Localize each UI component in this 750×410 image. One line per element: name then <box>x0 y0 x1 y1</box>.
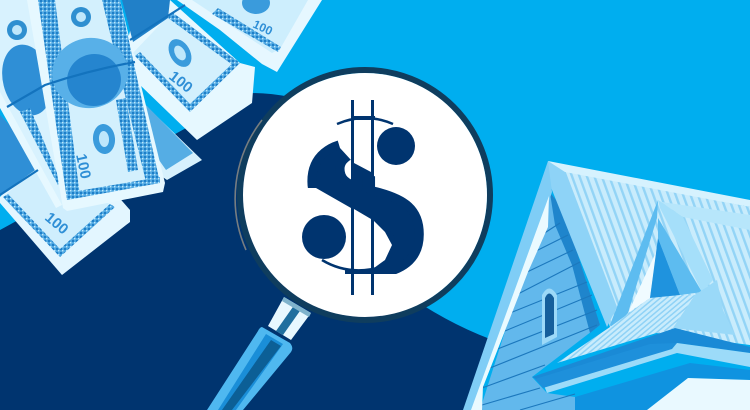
house: dormer ridge <box>658 200 750 230</box>
house: siding wall <box>480 193 600 410</box>
dollar sign: left bar <box>351 100 354 295</box>
illustration: house roof <box>463 161 750 410</box>
magnifier: rim highlight <box>235 120 262 250</box>
money stack: under layer right <box>140 100 202 180</box>
banknote label: 100 <box>166 68 196 97</box>
rubber bands <box>0 5 185 195</box>
dollar sign: character: $ <box>294 80 436 320</box>
house: lower porch roof <box>557 295 695 363</box>
background: navy curved shape <box>0 93 490 410</box>
magnifier: handle <box>207 327 292 410</box>
house: ridge trim <box>548 161 750 207</box>
house: attic vent <box>542 288 557 345</box>
illustration: stacks of money <box>0 0 322 275</box>
money stack: left <box>0 0 66 208</box>
banknote label: 100 <box>251 17 275 38</box>
house: dormer roof <box>683 217 750 345</box>
house: siding lines <box>482 223 597 410</box>
money stack: center right <box>122 0 255 140</box>
dollar sign: lower terminal <box>302 215 346 259</box>
magnifier: lens <box>243 73 487 317</box>
house: siding shade <box>550 193 600 333</box>
banknote label: 100 <box>41 209 72 238</box>
house: cornice <box>532 328 750 393</box>
money stack: bottom left <box>0 130 130 275</box>
dollar sign: white counters <box>296 120 428 280</box>
magnifier: rim <box>240 70 490 320</box>
magnifying glass <box>207 70 490 410</box>
dollar sign <box>302 100 424 295</box>
house: outer gable edge <box>463 161 552 410</box>
dollar sign: upper terminal <box>377 127 415 165</box>
money stack: top right <box>177 0 322 72</box>
house: main roof <box>565 170 750 345</box>
money stack: front <box>27 0 165 211</box>
house: wall shade <box>575 363 750 410</box>
banknote label: 100 <box>72 152 94 180</box>
house: white wall <box>647 378 750 410</box>
magnifier: neck <box>268 297 311 340</box>
house: dormer gable <box>610 200 713 330</box>
dollar sign: upper arc <box>337 118 393 124</box>
dollar sign: lower arc <box>322 260 385 270</box>
house: main gable trim <box>548 161 617 327</box>
dollar sign: right bar <box>371 100 374 295</box>
